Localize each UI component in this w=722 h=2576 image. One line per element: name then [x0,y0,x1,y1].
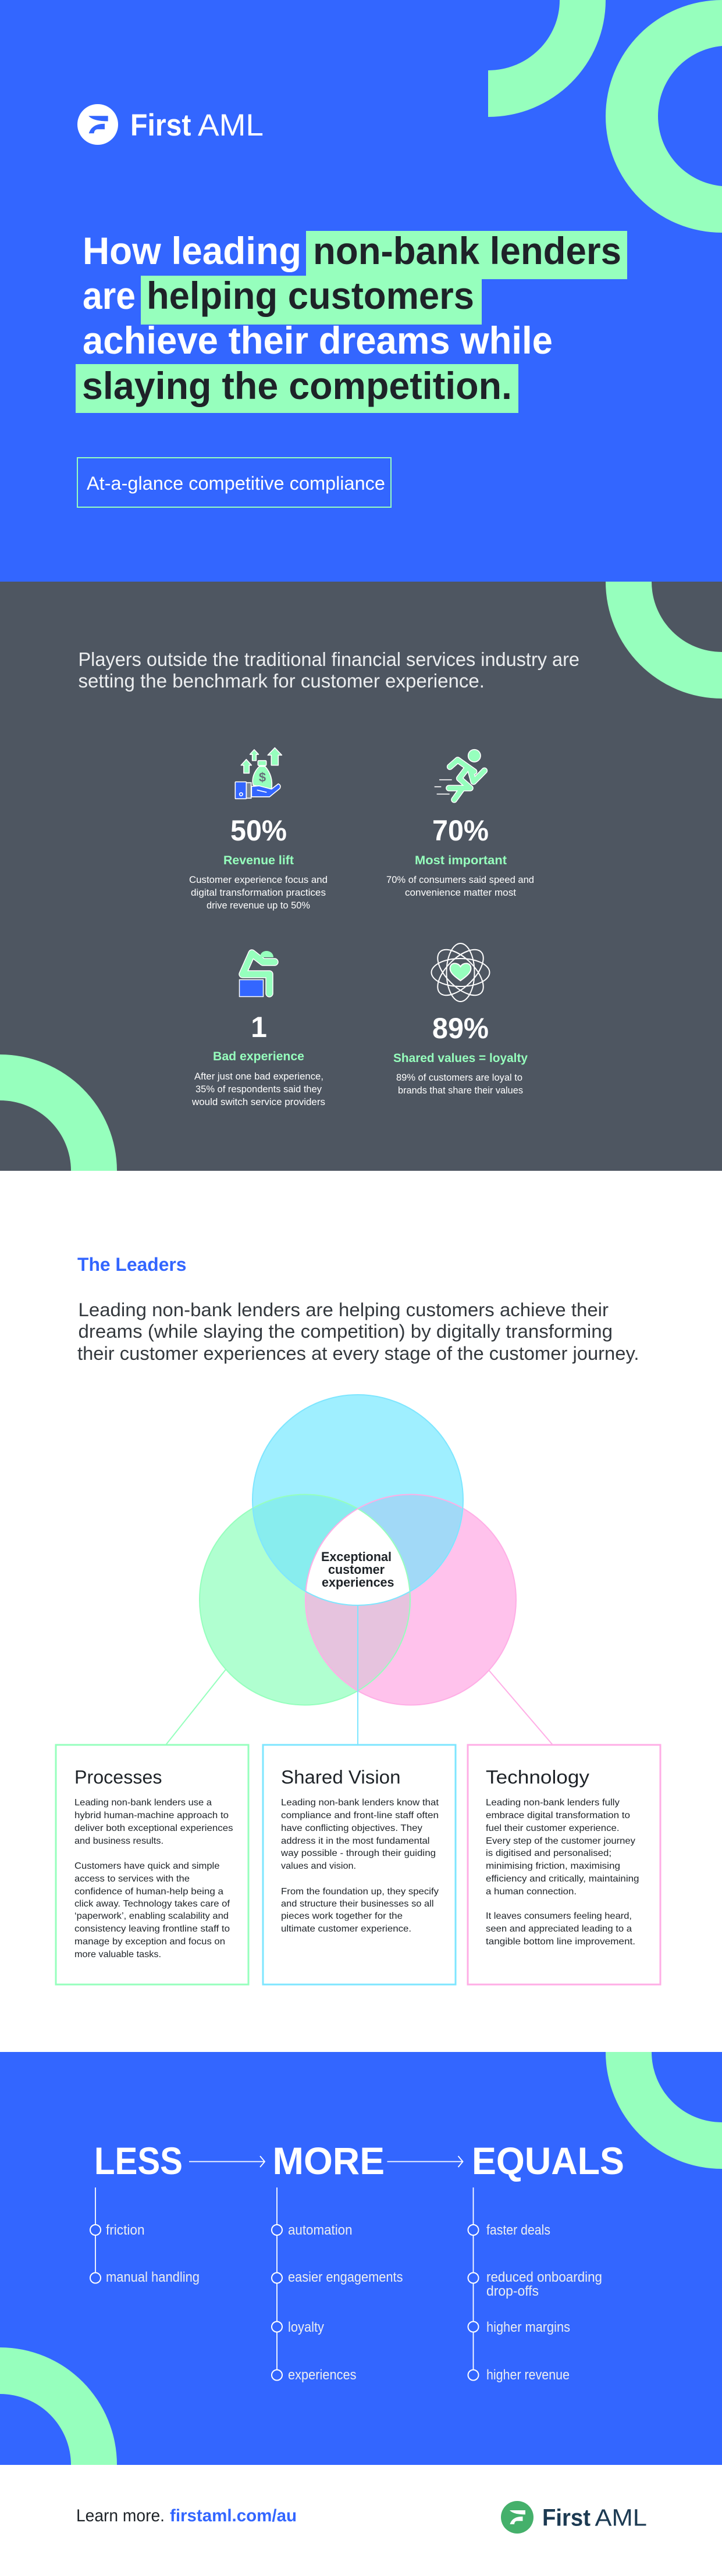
list: equals [468,2187,602,2383]
column headings [94,2139,624,2182]
title: non-bank lenders [313,229,621,272]
icon: money bag on hand with arrows: $ [259,770,266,785]
card: technology: fuel their customer experience. [486,1823,619,1833]
decorative quarter ring bottom left [0,2347,117,2465]
decorative quarter ring bottom left [0,1054,117,1171]
card: processes: confidence of human-help being a [74,1887,223,1897]
card: technology: tangible bottom line improvement. [486,1937,635,1947]
learn more link text: Learn more. [76,2506,165,2525]
title: How leading [83,229,301,272]
panel: hero [0,0,722,582]
stat: revenue lift: drive revenue up to 50% [207,900,310,911]
card: technology: Leading non-bank lenders fully [486,1798,620,1808]
card: technology: minimising friction, maximising [486,1861,620,1871]
stat: shared values [393,942,528,1096]
stat: revenue lift: Revenue lift [223,854,294,867]
stat: revenue lift: Customer experience focus and [189,875,328,885]
intro paragraph: Leading non-bank lenders are helping customers achieve their [78,1299,609,1320]
card: processes [56,1745,248,1984]
list: more [272,2187,403,2383]
card: processes: manage by exception and focus on [74,1937,225,1947]
stat: bad experience: 1 [251,1011,267,1043]
card: shared vision: Shared Vision [281,1767,400,1788]
intro paragraph [77,1299,639,1364]
intro text: Players outside the traditional financial services industry are [78,649,579,670]
list: less: friction [106,2222,144,2238]
card: technology: is digitised and personalised; [486,1848,611,1858]
card: technology: a human connection. [486,1887,577,1897]
decorative half ring [606,0,722,233]
stat: most important: Most important [415,854,507,867]
list: equals: higher margins [486,2320,570,2335]
stat: bad experience: 35% of respondents said they [195,1084,322,1095]
stat: most important: 70% of consumers said speed and [386,875,534,885]
card: processes: access to services with the [74,1874,190,1884]
panel: benchmark statistics [0,582,722,1171]
column headings: EQUALS [472,2139,624,2182]
heading: the leaders: The Leaders [77,1254,186,1275]
intro paragraph: dreams (while slaying the competition) by digitally transforming [78,1321,613,1342]
icon: money bag on hand with arrows [235,748,282,799]
card: processes: click away. Technology takes care of [74,1899,230,1909]
stat: revenue lift: digital transformation practices [191,888,326,898]
panel: footer [0,2465,722,2576]
card: processes: ‘paperwork’, enabling scalability and [74,1911,229,1921]
intro text [78,649,579,692]
arrow: less to more [189,2156,265,2167]
list: equals: higher revenue [486,2367,570,2383]
stat: most important [386,750,534,898]
card: shared vision: and structure their businesses so all [281,1899,434,1909]
card: technology: Technology [486,1767,590,1788]
card: processes: more valuable tasks. [74,1950,161,1959]
decorative quarter ring top right [606,582,722,699]
stat: shared values: 89% [432,1012,489,1045]
stat: shared values: brands that share their values [398,1085,523,1096]
card: shared vision: values and vision. [281,1861,356,1871]
card: shared vision: address it in the most fundamental [281,1836,429,1846]
column headings: LESS [94,2139,183,2182]
logo: First AML colour [501,2501,647,2534]
stat: most important: convenience matter most [405,888,516,898]
list: equals: faster deals [486,2222,550,2238]
card: processes: Customers have quick and simple [74,1861,220,1871]
list: more: experiences [288,2367,356,2383]
logo: First AML white [77,104,264,145]
stat: bad experience [191,951,325,1107]
stat: bad experience: Bad experience [213,1050,304,1063]
list: equals: reduced onboarding [486,2269,602,2285]
stat: shared values: Shared values = loyalty [393,1052,528,1065]
column headings: MORE [272,2139,385,2182]
card: shared vision [263,1745,456,1984]
list: equals: drop-offs [486,2283,539,2299]
logo: First AML colour: First [542,2504,591,2531]
title: achieve their dreams while [83,319,553,362]
stat: bad experience: would switch service providers [191,1097,325,1107]
stat: revenue lift [189,748,328,911]
card: shared vision: ultimate customer experience. [281,1924,411,1934]
intro paragraph: their customer experiences at every stage of the customer journey. [77,1343,639,1364]
card: processes: hybrid human-machine approach to [74,1811,229,1820]
decorative quarter ring top right [606,2052,722,2169]
card: technology: seen and appreciated leading to a [486,1924,632,1934]
card: technology: efficiency and critically, maintaining [486,1874,639,1884]
venn centre label: experiences [322,1575,394,1590]
panel: less more equals [0,2052,722,2465]
logo: First AML white: First [130,108,191,142]
list: more: automation [288,2222,353,2238]
logo: First AML white: AML [198,108,264,142]
card: technology: It leaves consumers feeling heard, [486,1911,632,1921]
list: less [90,2187,200,2285]
list: more: loyalty [288,2320,324,2335]
icon: atom with heart [430,942,491,1003]
intro text: setting the benchmark for customer experience. [78,670,485,692]
card: technology: Every step of the customer journey [486,1836,635,1846]
stat: revenue lift: 50% [230,814,287,847]
card: shared vision: way possible - through their guiding [280,1848,436,1858]
card: processes: consistency leaving frontline staff to [74,1924,230,1934]
card: shared vision: have conflicting objectives. They [281,1823,422,1833]
venn centre label: Exceptional [321,1549,392,1564]
learn more link text: firstaml.com/au [170,2506,297,2525]
subtitle box: At-a-glance competitive compliance [87,473,385,494]
title: slaying the competition. [82,364,512,407]
card: processes: Processes [74,1767,162,1788]
card: processes: Leading non-bank lenders use a [74,1798,212,1808]
card: shared vision: compliance and front-line staff often [281,1811,439,1820]
stat: bad experience: After just one bad experience, [194,1071,323,1082]
list: more: easier engagements [288,2269,403,2285]
title [76,229,627,413]
card: processes: and business results. [74,1836,163,1846]
venn diagram [200,1395,516,1745]
panel: the leaders [55,1257,661,1986]
logo: First AML colour: AML [595,2504,647,2531]
arrow: more to equals [387,2156,463,2167]
card: shared vision: pieces work together for the [281,1911,403,1921]
stat: most important: 70% [432,814,489,847]
learn more link text [76,2506,297,2525]
title: helping customers [147,274,474,317]
icon: running person [435,750,485,800]
subtitle box [77,458,391,507]
card: technology [468,1745,660,1984]
card: shared vision: From the foundation up, they specify [281,1887,439,1897]
venn centre label [321,1549,394,1590]
decorative quarter ring [488,0,606,117]
card: technology: embrace digital transformation to [486,1811,630,1820]
title: are [83,274,136,317]
card: processes: deliver both exceptional experiences [74,1823,233,1833]
stat: shared values: 89% of customers are loyal to [396,1073,522,1083]
icon: slumped person at desk [240,951,275,997]
connector lines [166,1669,553,1745]
list: less: manual handling [106,2269,200,2285]
card: shared vision: Leading non-bank lenders know that [281,1798,439,1808]
venn centre label: customer [328,1562,385,1577]
